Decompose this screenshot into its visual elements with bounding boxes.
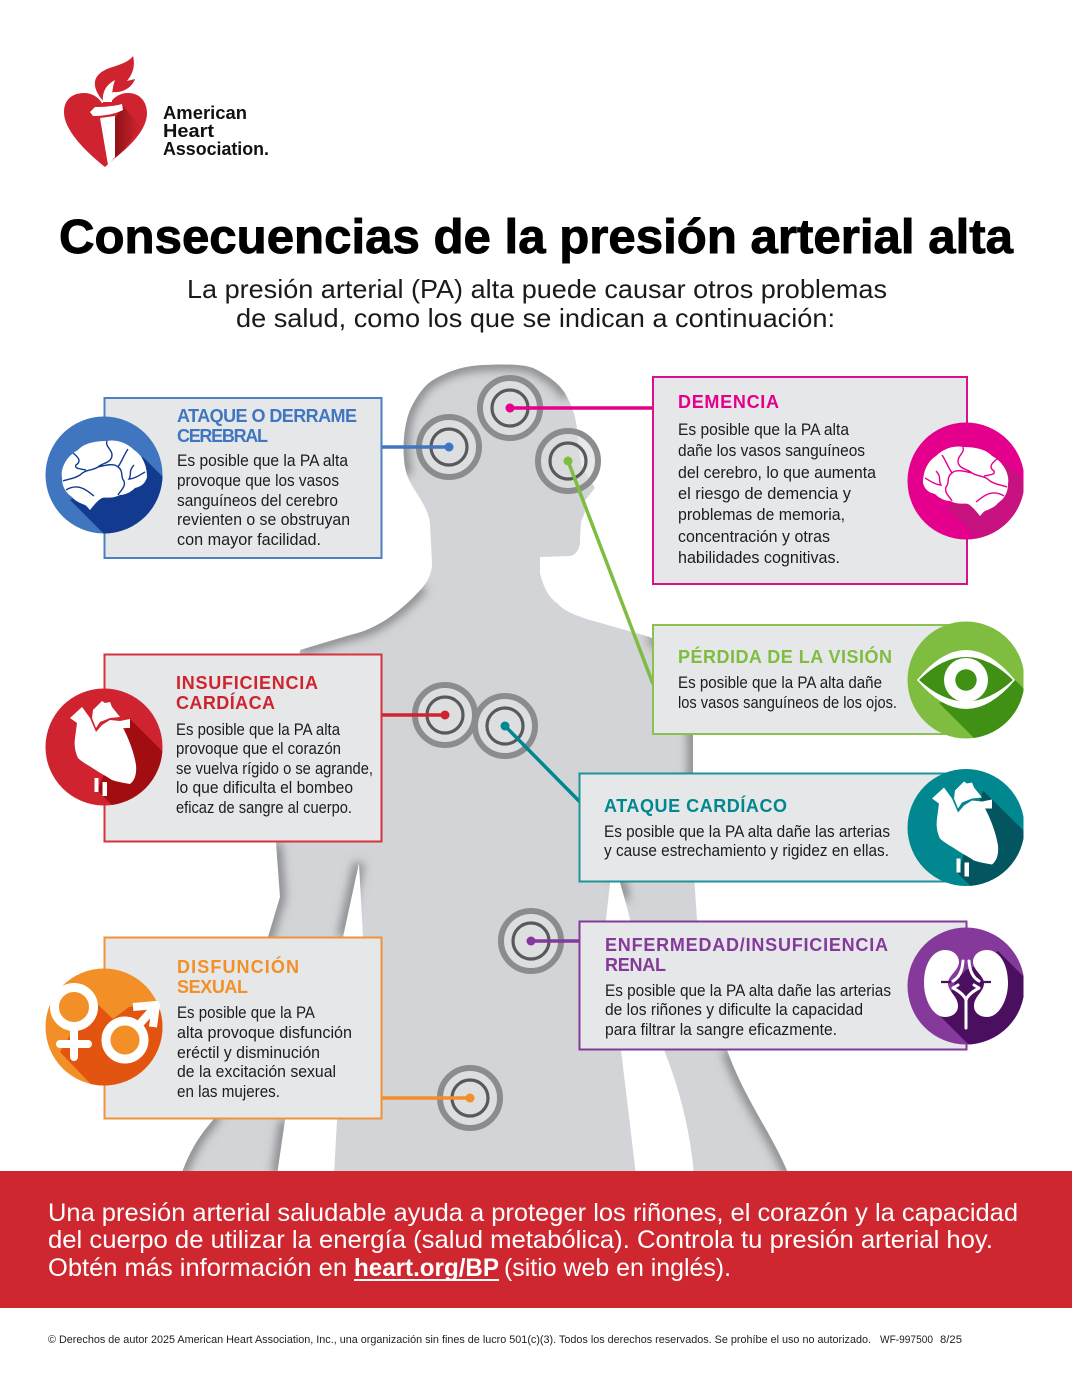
body text: revienten o se obstruyan [177, 510, 350, 529]
icon: kidneys [908, 928, 1024, 1044]
footer: copyright: © Derechos de autor 2025 American Heart Association, Inc., una organización sin fines de lucro 501(c)(3). Todos los derechos reservados. Se prohíbe el uso no autorizado. [48, 1334, 871, 1346]
icon: heart and torch [64, 56, 147, 167]
heading [177, 956, 299, 997]
connector: heart attack [500, 722, 580, 802]
heading: PÉRDIDA DE LA VISIÓN [678, 646, 892, 667]
logo wordmark [163, 103, 269, 159]
body text: alta provoque disfunción [177, 1023, 352, 1042]
body text: y cause estrechamiento y rigidez en ellas. [604, 841, 889, 860]
subtitle: de salud, como los que se indican a continuación: [236, 303, 835, 333]
body text: lo que dificulta el bombeo [176, 778, 353, 797]
body text: el riesgo de demencia y [678, 484, 851, 503]
body text [678, 673, 897, 712]
card box [580, 774, 950, 882]
banner text: (sitio web en inglés). [504, 1254, 731, 1282]
heading [176, 673, 318, 713]
body text: del cerebro, lo que aumenta [678, 463, 877, 482]
logo wordmark: Association. [163, 139, 269, 159]
card box [104, 654, 382, 842]
body text: sanguíneos del cerebro [177, 491, 338, 510]
body text: se vuelva rígido o se agrande, [176, 759, 373, 778]
icon: female and male symbols [46, 968, 162, 1086]
panel: ataque o derrame cerebral [46, 398, 382, 570]
body text: Es posible que la PA alta [177, 451, 348, 470]
heading: DEMENCIA [678, 392, 779, 412]
target: stroke [419, 417, 479, 477]
body text: Es posible que la PA [177, 1003, 316, 1022]
body text: problemas de memoria, [678, 505, 845, 524]
card box [580, 922, 966, 1050]
icon: brain [908, 422, 1024, 540]
footer: copyright: 8/25 [940, 1334, 962, 1346]
logo wordmark: Heart [163, 121, 214, 141]
card box [653, 377, 967, 584]
target: vision [538, 431, 598, 491]
icon: eye [908, 622, 1024, 738]
target: dementia [480, 378, 540, 438]
body text: provoque que el corazón [176, 739, 341, 758]
banner text: heart.org/BP [354, 1254, 499, 1282]
body text [604, 822, 890, 860]
body text: Es posible que la PA alta dañe las arterias [605, 981, 891, 1000]
heading: ATAQUE CARDÍACO [604, 795, 787, 816]
body text: dañe los vasos sanguíneos [678, 441, 865, 460]
banner text: del cuerpo de utilizar la energía (salud metabólica). Controla tu presión arterial hoy. [48, 1226, 993, 1254]
target: heart attack [475, 696, 535, 756]
heading: CEREBRAL [177, 426, 268, 446]
banner: call to action [0, 1171, 1072, 1308]
body text: con mayor facilidad. [177, 530, 321, 549]
panel: disfunción sexual [46, 938, 382, 1118]
icon: brain [46, 416, 162, 534]
connector: heart failure [382, 710, 450, 720]
heading: INSUFICIENCIA [176, 673, 318, 693]
body text [177, 1003, 352, 1101]
connector: stroke [382, 442, 454, 452]
connector: sexual dysfunction [382, 1094, 474, 1102]
body text: eficaz de sangre al cuerpo. [176, 798, 352, 817]
heading [605, 935, 888, 975]
target: sexual dysfunction [440, 1068, 500, 1128]
title: Consecuencias de la presión arterial alta [59, 211, 1013, 264]
body text: en las mujeres. [177, 1082, 280, 1101]
logo: American Heart Association [64, 56, 269, 167]
target: heart failure [415, 685, 475, 745]
body text: habilidades cognitivas. [678, 548, 840, 567]
panel: enfermedad/insuficiencia renal [578, 920, 1024, 1050]
connector: vision [564, 456, 653, 684]
human body silhouette [181, 364, 789, 1175]
connector: dementia [506, 404, 652, 412]
banner text: Una presión arterial saludable ayuda a proteger los riñones, el corazón y la capacidad [48, 1199, 1018, 1227]
body text: de la excitación sexual [177, 1062, 336, 1081]
subtitle [187, 274, 887, 333]
body text [605, 981, 891, 1039]
icon: heart [46, 688, 162, 806]
heading: SEXUAL [177, 977, 248, 997]
body text: provoque que los vasos [177, 471, 339, 490]
banner text: Obtén más información en [48, 1254, 347, 1282]
connector: kidney [526, 936, 579, 946]
body text: los vasos sanguíneos de los ojos. [678, 693, 897, 712]
heading: ATAQUE O DERRAME [177, 406, 357, 426]
panel: ataque cardíaco [578, 769, 1024, 886]
card box [104, 938, 382, 1118]
panel: insuficiencia cardíaca [46, 654, 382, 860]
body text [678, 420, 877, 567]
card box [104, 398, 382, 558]
heading: CARDÍACA [176, 692, 275, 713]
body text: eréctil y disminución [177, 1043, 320, 1062]
panel: pérdida de la visión [652, 622, 1024, 738]
body text: concentración y otras [678, 527, 830, 546]
body text: de los riñones y dificulte la capacidad [605, 1000, 863, 1019]
heading: RENAL [605, 955, 666, 975]
body text: Es posible que la PA alta dañe las arterias [604, 822, 890, 841]
body text [177, 451, 350, 549]
body text: Es posible que la PA alta [678, 420, 849, 439]
body text: Es posible que la PA alta [176, 720, 340, 739]
target: kidney [501, 911, 561, 971]
icon: heart [908, 769, 1024, 886]
logo wordmark: American [163, 103, 247, 123]
footer: copyright: WF-997500 [880, 1334, 933, 1346]
panel: demencia [652, 376, 1024, 585]
heading: ENFERMEDAD/INSUFICIENCIA [605, 935, 888, 955]
body text: para filtrar la sangre eficazmente. [605, 1020, 837, 1039]
banner text [48, 1199, 1018, 1282]
body text: Es posible que la PA alta dañe [678, 673, 882, 692]
heading: DISFUNCIÓN [177, 956, 299, 977]
body text [176, 720, 373, 817]
subtitle: La presión arterial (PA) alta puede causar otros problemas [187, 274, 887, 304]
card box [653, 625, 953, 734]
heading [177, 406, 357, 446]
